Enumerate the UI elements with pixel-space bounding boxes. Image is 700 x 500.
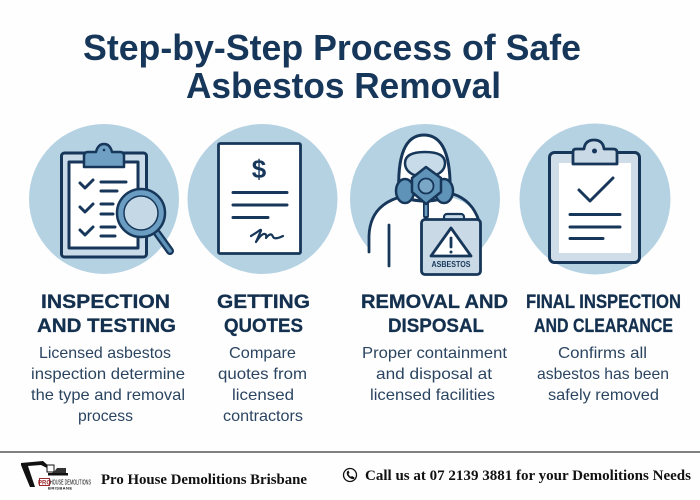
logo: excavator: HOUSE DEMOLITIONS (50, 480, 91, 486)
heading (37, 291, 176, 337)
icon: worker in protective suit with asbestos box (350, 124, 500, 282)
logo: excavator: BRISBANE (48, 486, 72, 490)
heading: INSPECTION (41, 291, 170, 313)
text block (362, 345, 508, 404)
icon: quote document (188, 124, 338, 274)
footer (21, 461, 691, 490)
heading: AND TESTING (37, 315, 176, 337)
icon: quote document: $ (252, 154, 267, 184)
icon: worker in protective suit with asbestos box: ASBESTOS (432, 260, 471, 269)
text block: contractors (223, 408, 303, 425)
panel: getting quotes (188, 124, 338, 425)
text block: Compare (229, 345, 296, 362)
phone call to action: Call us at 07 2139 3881 for your Demolitions Needs (365, 468, 691, 484)
text block: Confirms all (558, 345, 647, 362)
text block (31, 345, 185, 425)
title: Asbestos Removal (186, 65, 501, 106)
heading: REMOVAL AND (361, 291, 508, 313)
text block: inspection determine (31, 366, 185, 383)
title (83, 27, 581, 106)
text block (218, 345, 307, 425)
text block: licensed facilities (370, 387, 495, 404)
heading: QUOTES (224, 315, 303, 337)
company name: Pro House Demolitions Brisbane (101, 472, 307, 488)
text block: process (78, 408, 133, 425)
heading (526, 291, 681, 337)
heading: AND CLEARANCE (534, 315, 673, 337)
logo: excavator: PRO (38, 480, 51, 486)
text block (537, 345, 669, 404)
text block: Proper containment (362, 345, 508, 362)
heading (361, 291, 508, 337)
panel: inspection and testing (29, 124, 185, 425)
text block: licensed (232, 387, 294, 404)
panel: final inspection and clearance (520, 124, 681, 404)
title: Step-by-Step Process of Safe (83, 27, 581, 68)
text block: the type and removal (31, 387, 185, 404)
text block: Licensed asbestos (39, 345, 171, 362)
text block: and disposal at (376, 366, 493, 383)
heading: GETTING (217, 291, 310, 313)
icon: clipboard with check mark (520, 124, 670, 274)
logo: excavator (21, 461, 91, 490)
text block: asbestos has been (537, 366, 669, 383)
icon: phone (344, 468, 356, 482)
icon: clipboard with magnifier (29, 124, 179, 274)
text block: quotes from (218, 366, 307, 383)
text block: safely removed (548, 387, 659, 404)
heading: DISPOSAL (388, 315, 484, 337)
heading (217, 291, 310, 337)
panel: removal and disposal (350, 124, 508, 404)
